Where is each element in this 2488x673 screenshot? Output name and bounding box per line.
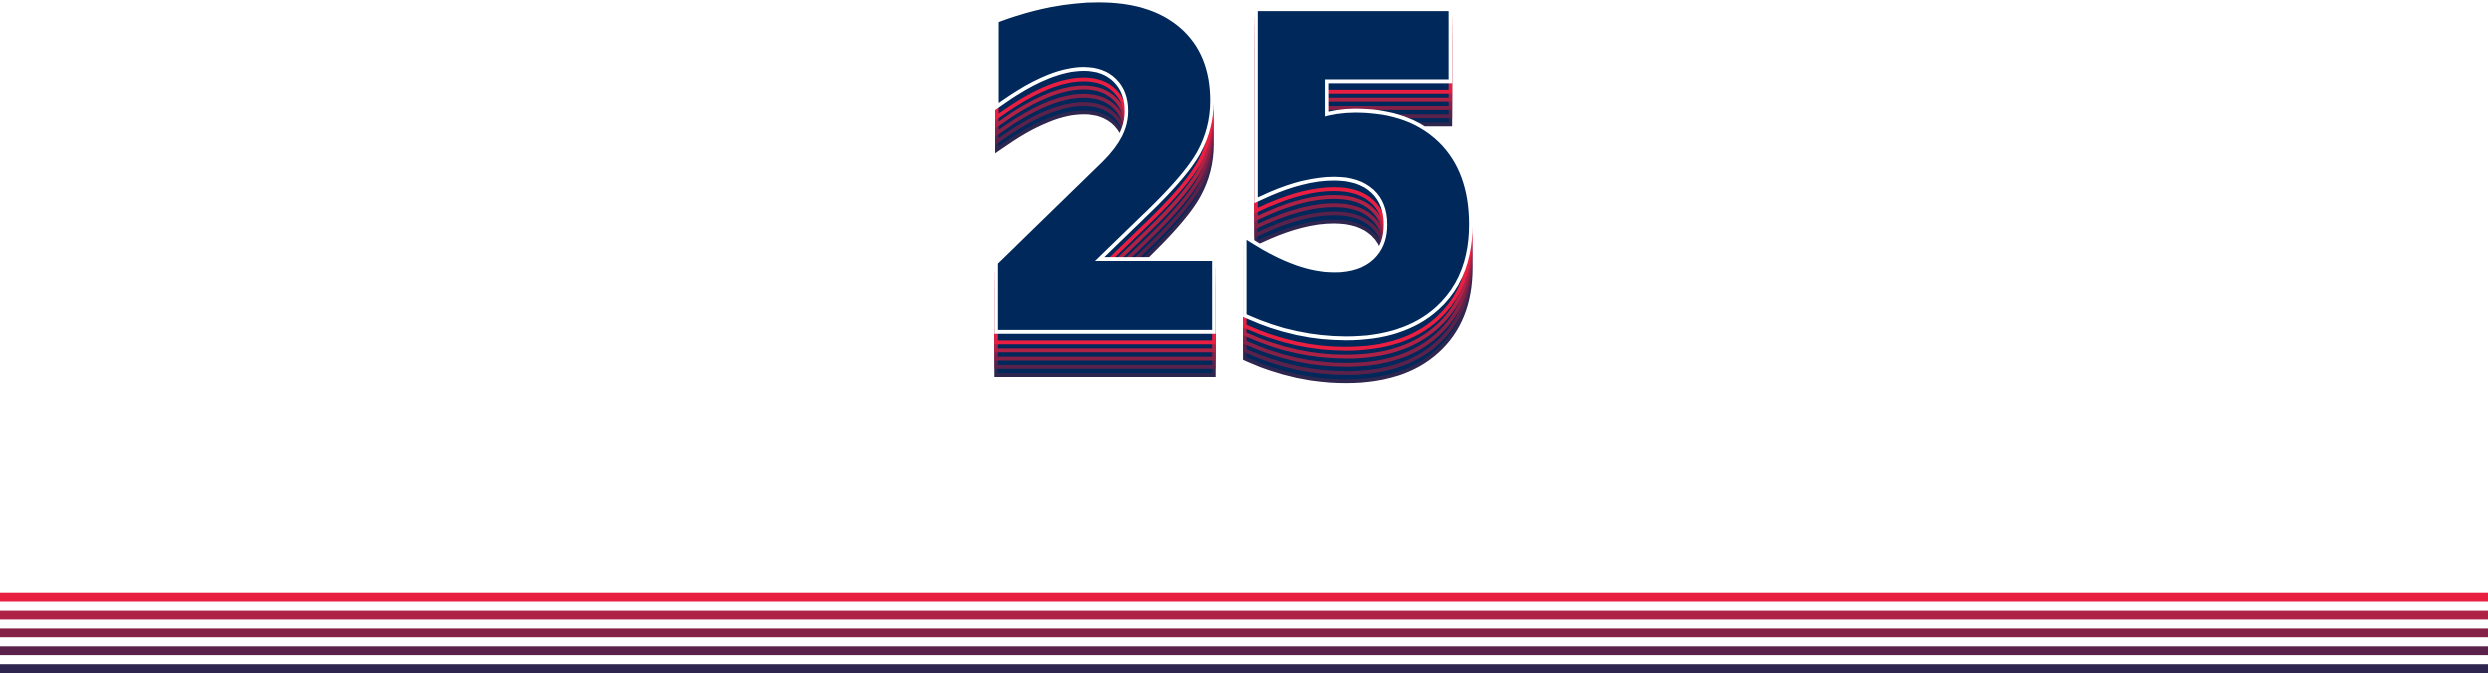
gradient stripes: [0, 593, 2488, 673]
